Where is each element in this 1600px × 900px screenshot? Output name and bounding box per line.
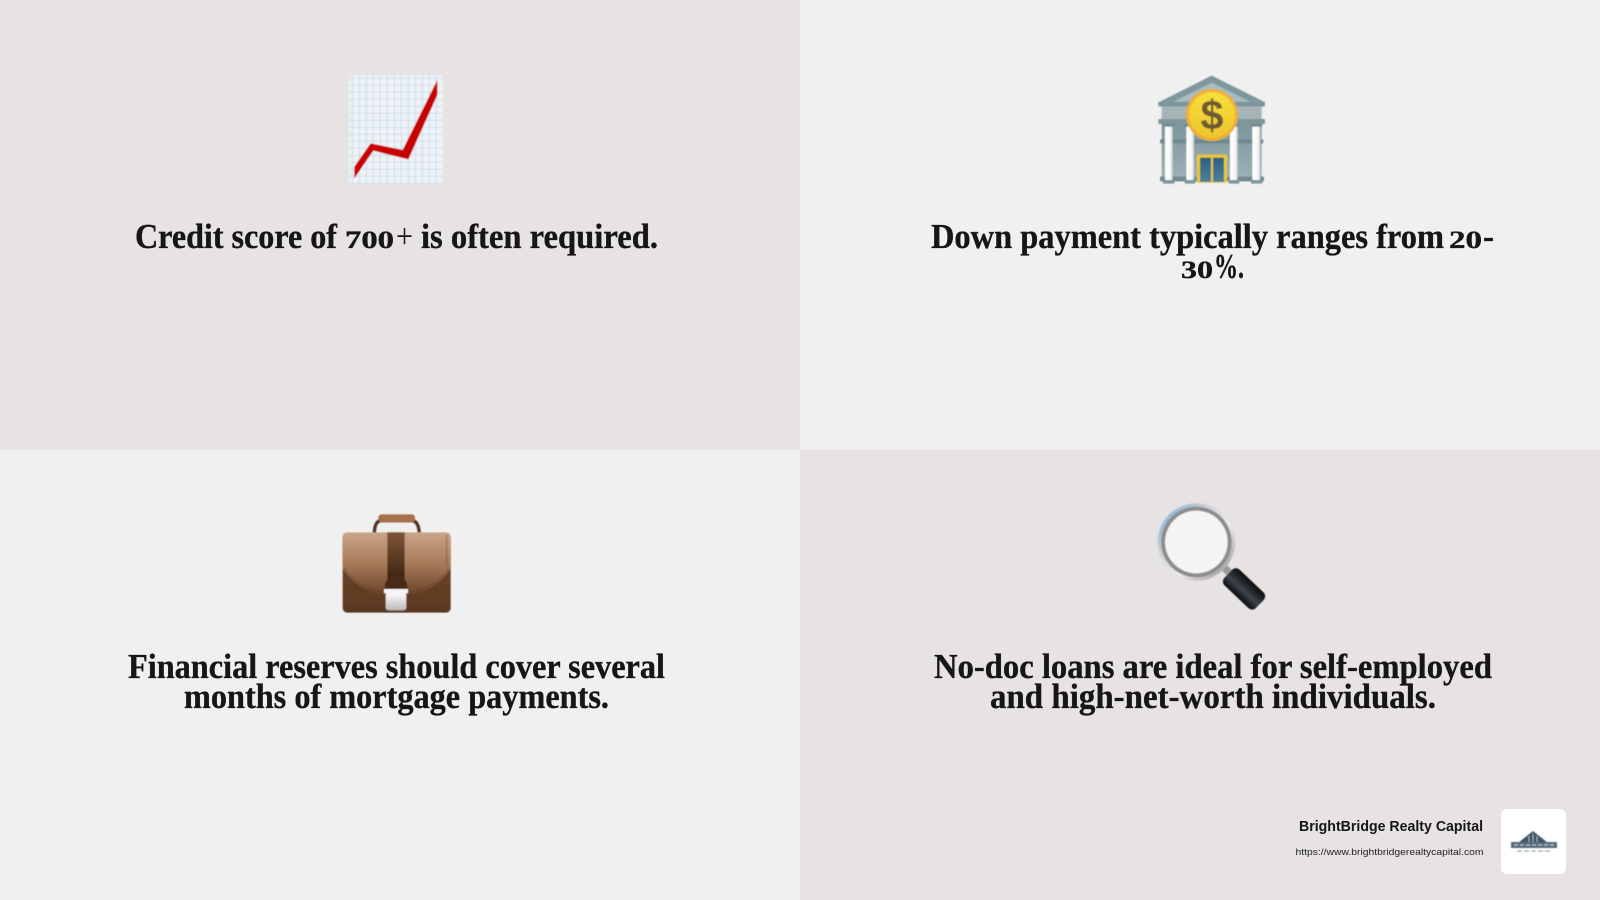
heading line 1: down payment: 20 [1449,227,1482,254]
heading line 1: down payment: Down payment typically ranges from [931,217,1444,256]
logo tile [1501,809,1566,874]
panel background [0,450,800,900]
heading: credit score: Credit score of [135,217,337,256]
heading: credit score [135,217,658,256]
icon: bank with dollar coin: $ [1200,92,1223,138]
icon: rising chart [349,75,443,184]
heading line 1: financial reserves: Financial reserves should cover several [128,647,665,686]
heading line 2: financial reserves: months of mortgage payments. [184,677,609,716]
heading line 1: down payment: - [1483,217,1494,256]
heading line 2: no-doc loans: and high-net-worth individuals. [990,677,1436,716]
heading line 2: down payment [1181,247,1244,286]
panel background [800,450,1600,900]
brand url: https://www.brightbridgerealtycapital.com [1296,847,1484,858]
panel: credit score [0,0,800,450]
brand name: BrightBridge Realty Capital [1299,819,1483,835]
panel background [800,0,1600,450]
panel: no-doc loans [800,450,1600,900]
heading line 2: down payment: %. [1214,247,1244,286]
logo mark [1511,831,1557,851]
heading: credit score: + [396,217,413,256]
logo background [1501,809,1566,874]
heading: credit score: 700 [345,227,394,254]
heading line 1: no-doc loans: No-doc loans are ideal for self-employed [934,647,1492,686]
heading: credit score: is often required. [421,217,658,256]
panel: financial reserves [0,450,800,900]
icon: bank with dollar coin [1158,76,1265,184]
icon: briefcase [343,514,451,613]
panel background [0,0,800,450]
heading line 2: down payment: 30 [1181,257,1213,284]
brand footer [1296,809,1566,874]
panel: down payment [800,0,1600,450]
icon: magnifying glass [1158,503,1267,612]
